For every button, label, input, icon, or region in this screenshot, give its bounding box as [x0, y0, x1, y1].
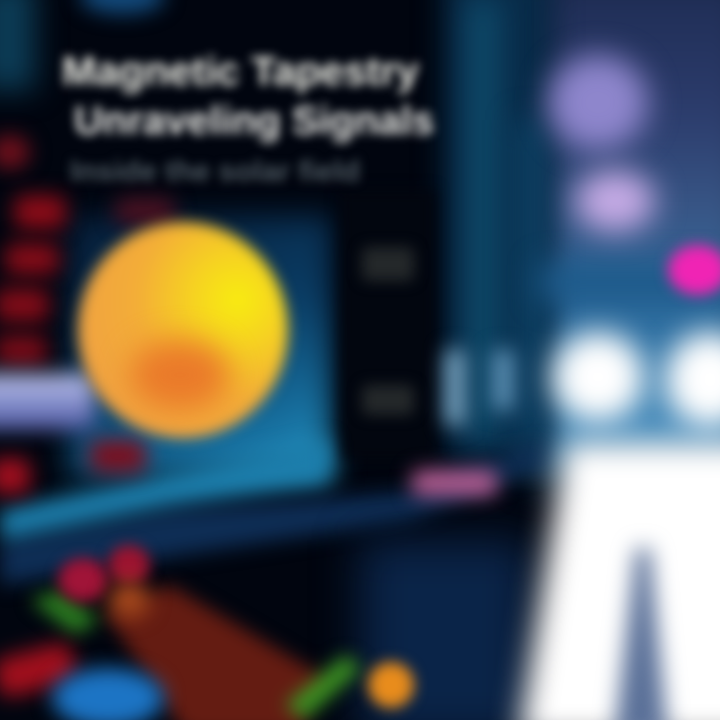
icon: red block above sphere: [115, 198, 175, 224]
column: dark blue base: [445, 0, 550, 460]
glow: center pale columns: [445, 350, 465, 425]
block: [14, 195, 66, 229]
block: [0, 458, 30, 494]
block: [0, 135, 30, 169]
block: [0, 335, 47, 365]
column: teal stripe right: [518, 120, 544, 440]
glow: purple lower: [575, 170, 655, 232]
column: teal stripe: [468, 0, 498, 440]
icon: orange patch: [108, 582, 150, 618]
callout: pink strip: [412, 470, 497, 496]
stat labels: [358, 242, 418, 420]
icon: crimson blob right: [108, 545, 150, 585]
ribbon: green right: [285, 655, 362, 720]
glow: white left: [552, 332, 644, 422]
band: right horizontal blue: [540, 265, 720, 299]
ribbon: green left: [30, 590, 100, 635]
panel: top left teal corner: [0, 0, 35, 90]
stat: lower value: [362, 385, 414, 415]
icon: red lower left: [0, 640, 79, 700]
band: lavender: [0, 374, 95, 430]
icon: blue blob: [52, 668, 164, 720]
block: [0, 288, 49, 322]
glow: white right: [665, 332, 720, 427]
icon: red blocks on left: [0, 123, 80, 374]
panel: right background: [530, 0, 720, 470]
title: Magnetic Tapestry: [62, 48, 419, 94]
icon: orange sphere: [78, 222, 288, 438]
stat: upper value: [362, 247, 414, 281]
title second line: Unraveling Signals: [74, 99, 434, 143]
icon: crimson blob left: [58, 558, 108, 602]
panel: black side column: [340, 190, 435, 460]
block: [5, 243, 59, 275]
glow: purple upper: [548, 55, 648, 150]
icon: pink blob: [668, 245, 720, 295]
icon: red blocks under sphere: [0, 426, 159, 508]
ribbon: dark red band: [105, 585, 330, 720]
block: [90, 440, 146, 472]
glow: center pale column right: [492, 350, 514, 410]
icon: top blue arc: [80, 0, 165, 14]
panel: central info box: [70, 215, 332, 477]
subtitle: Inside the solar field: [70, 155, 360, 188]
icon: orange circle: [368, 662, 414, 708]
panel: bottom dark navy: [360, 540, 530, 720]
sphere: lower orange patch: [130, 340, 230, 410]
